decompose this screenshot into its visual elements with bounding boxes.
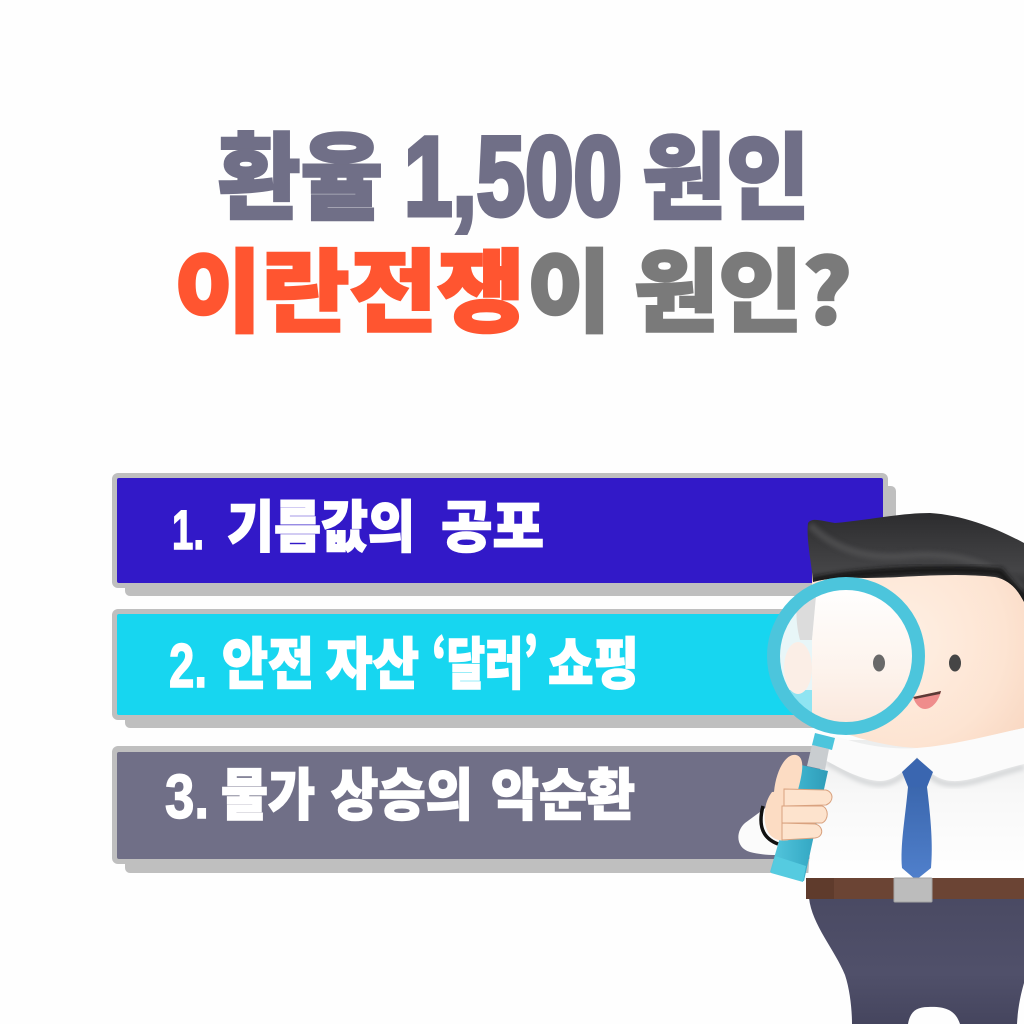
bar 3 label [165, 751, 635, 832]
title line 2: 원인? [634, 220, 852, 350]
title [174, 103, 852, 350]
title line 1: 원인 [642, 103, 810, 239]
handle [770, 765, 828, 881]
fingers [782, 789, 832, 840]
bar 1 label: 1. [172, 498, 204, 561]
title line 2: 이 [527, 220, 611, 350]
thumb [774, 755, 802, 802]
list bar 3 [112, 746, 896, 873]
hair [808, 513, 1024, 602]
title line 1: 환율 [218, 103, 383, 239]
hand [761, 755, 832, 844]
bar 3 label: 악순환 [491, 751, 635, 832]
collar [825, 728, 1024, 781]
lens ring [774, 584, 918, 728]
lens contents [780, 590, 912, 722]
bar 2 label: 쇼핑 [548, 620, 639, 701]
bar 1 label: 공포 [441, 483, 544, 564]
mouth [913, 691, 941, 709]
title line 1: 1,500 [404, 114, 622, 239]
shirt [808, 740, 1024, 880]
cuff [761, 806, 778, 844]
title line 1 [218, 103, 810, 239]
bar 2 label: 2. [169, 632, 207, 701]
bar 3 label: 상승의 [331, 751, 473, 832]
bar 2 label: 안전 [222, 620, 314, 701]
bar 3 label: 3. [165, 763, 209, 832]
right eye [949, 654, 961, 672]
collar shadow [826, 760, 1024, 784]
bar 1 label: 기름값의 [227, 483, 415, 564]
sleeve [738, 775, 815, 855]
palm [765, 790, 800, 841]
tie [902, 758, 933, 880]
bar 2 label [169, 620, 639, 701]
infographic canvas [112, 130, 1024, 1024]
belt [806, 878, 1024, 899]
bar 2 label: 자산 [326, 620, 419, 701]
magnifier [770, 584, 925, 882]
title line 2 [174, 220, 852, 350]
bar 2 label: ‘달러’ [432, 620, 538, 701]
head [812, 570, 1024, 748]
trousers [809, 898, 1024, 1024]
bar 1 label [172, 483, 544, 564]
left eye [873, 654, 885, 672]
buckle [894, 878, 932, 902]
list bar 1 [112, 473, 896, 596]
mouth line [913, 691, 941, 699]
neck and silver shaft [812, 733, 835, 750]
list bar 2 [112, 609, 896, 728]
character: businessman with magnifier [738, 513, 1024, 1024]
title line 2: 이란전쟁 [174, 220, 525, 350]
bar 3 label: 물가 [221, 751, 315, 832]
ear [784, 642, 812, 694]
